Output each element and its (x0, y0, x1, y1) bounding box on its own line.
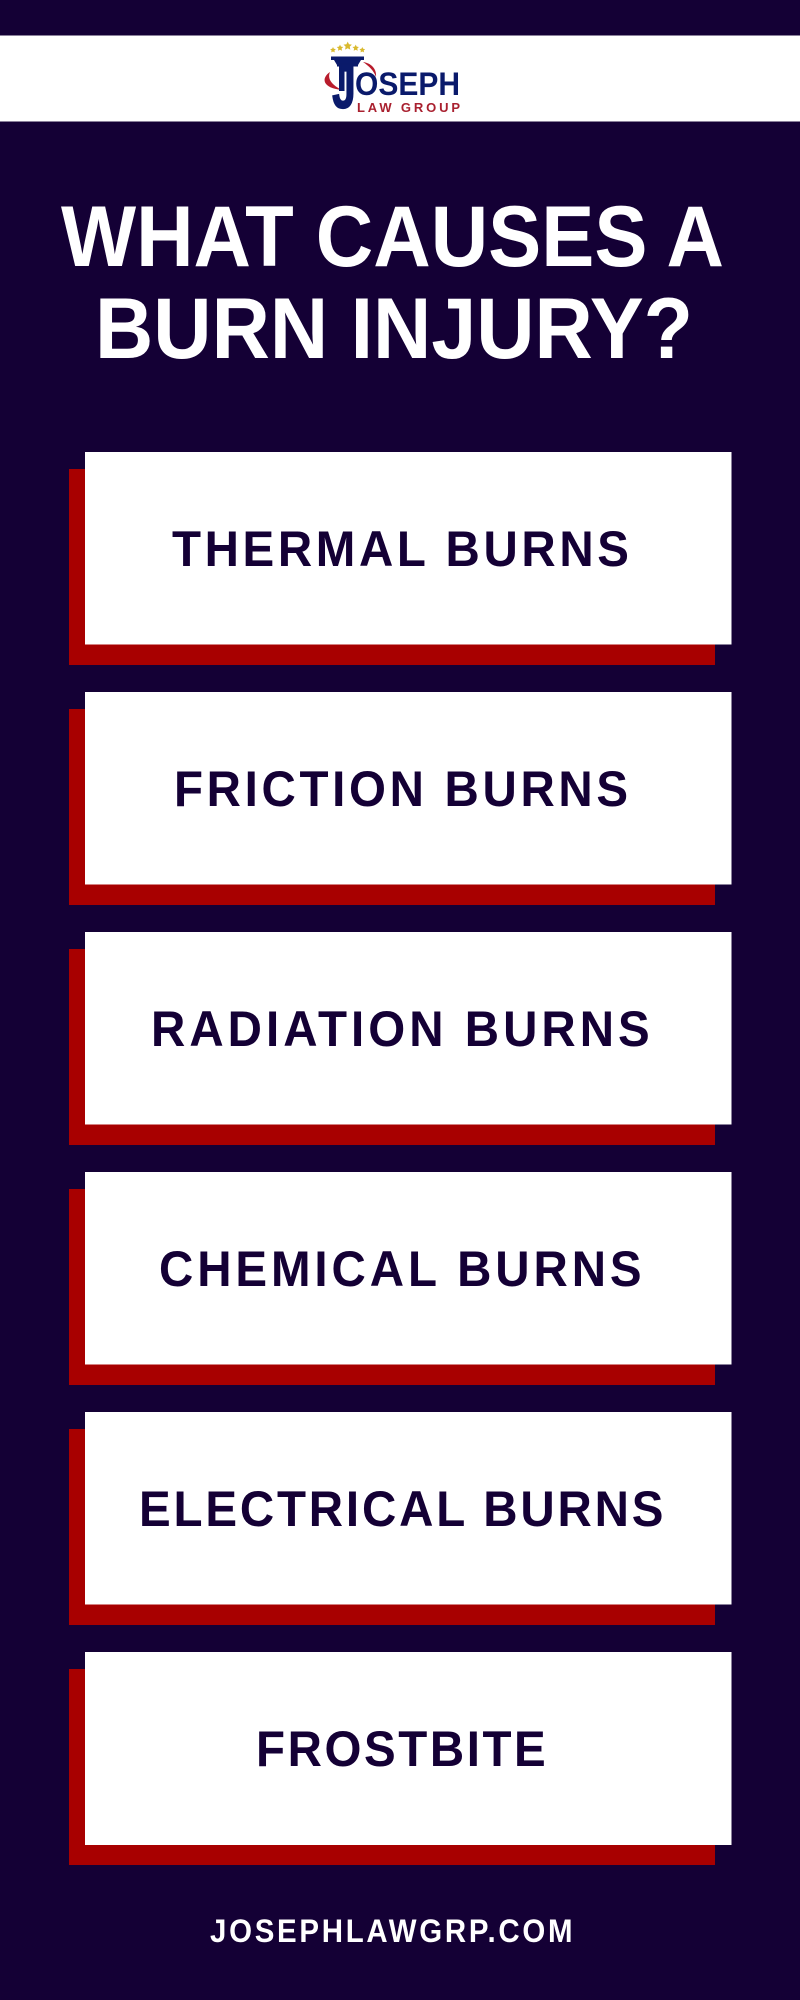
icon: five gold stars (330, 42, 365, 52)
logo wordmark: LAW GROUP (357, 100, 460, 115)
title: WHAT CAUSES A (61, 189, 724, 285)
title: BURN INJURY? (95, 281, 693, 377)
logo wordmark: OSEPH (355, 66, 460, 102)
logo wordmark (332, 50, 460, 122)
card: thermal burns (69, 452, 732, 665)
card: chemical burns (69, 1172, 732, 1385)
icon: pillar and swoosh (325, 56, 376, 91)
title (61, 189, 724, 377)
card: electrical burns: ELECTRICAL BURNS (139, 1482, 663, 1537)
card: electrical burns (69, 1412, 732, 1625)
logo: Joseph Law Group (325, 42, 460, 122)
logo wordmark: J (332, 50, 356, 122)
card: frostbite: FROSTBITE (256, 1722, 546, 1777)
card: friction burns: FRICTION BURNS (174, 762, 628, 817)
card: friction burns (69, 692, 732, 905)
card: thermal burns: THERMAL BURNS (172, 522, 629, 577)
footer website: JOSEPHLAWGRP.COM (210, 1913, 572, 1949)
card: chemical burns: CHEMICAL BURNS (159, 1242, 642, 1297)
card: radiation burns (69, 932, 732, 1145)
card: radiation burns: RADIATION BURNS (151, 1002, 650, 1057)
header band with logo (0, 36, 800, 122)
card: frostbite (69, 1652, 732, 1865)
